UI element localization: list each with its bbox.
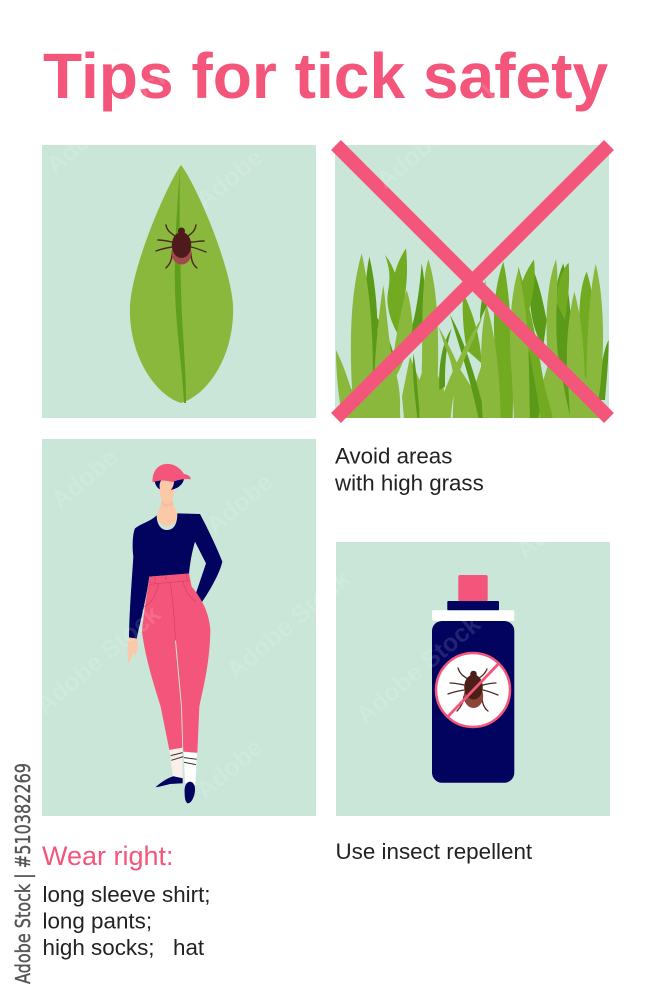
text: use insect repellent: Use insect repellent — [336, 839, 533, 864]
mid blades — [385, 248, 597, 418]
face and neck — [157, 480, 177, 526]
watermark: repeated stock marks: Adobe — [191, 143, 269, 215]
hair — [155, 479, 184, 490]
text: avoid areas: with high grass — [334, 471, 484, 496]
chin shadow — [161, 500, 173, 507]
grass illustration — [336, 248, 609, 418]
shirt — [129, 513, 222, 639]
heading: wear right: Wear right: — [42, 841, 174, 871]
panel: tick on leaf — [42, 145, 316, 418]
watermark: repeated stock marks: Adobe Stock — [371, 75, 506, 195]
icon: leaf — [130, 165, 233, 403]
text: avoid areas — [334, 444, 484, 496]
pants — [142, 573, 210, 753]
front light blades — [336, 253, 603, 418]
watermark: repeated stock marks: Adobe — [46, 443, 124, 515]
base fill — [340, 340, 599, 418]
socks — [169, 748, 183, 780]
panel: person clothing — [42, 439, 316, 816]
pants seams — [144, 573, 196, 640]
hand — [128, 635, 138, 663]
cap — [153, 464, 191, 482]
watermark: repeated stock marks: Adobe Stock — [41, 60, 176, 180]
panel: insect repellent — [336, 542, 610, 816]
figure: woman in cap — [128, 464, 222, 803]
text: clothing list: hat — [173, 935, 205, 960]
watermark: repeated stock marks: Adobe — [191, 733, 269, 805]
watermark: repeated stock marks: Adobe — [511, 493, 589, 565]
text: clothing list: long pants; — [42, 908, 152, 934]
watermark: repeated stock marks: Adobe Stock — [31, 600, 166, 720]
watermark: repeated stock marks: Adobe Stock — [221, 565, 356, 685]
watermark: stock id: Adobe Stock | #510382269 — [11, 763, 35, 984]
watermark: repeated stock marks: Adobe — [201, 468, 279, 540]
icon: tick — [156, 225, 206, 268]
panel: avoid high grass — [335, 145, 609, 418]
text: avoid areas: Avoid areas — [335, 444, 452, 468]
icon: spray can — [432, 575, 514, 783]
watermark: repeated stock marks: Adobe Stock — [351, 610, 486, 730]
back dark blades — [365, 257, 609, 418]
icon: red cross — [336, 145, 609, 418]
title: Tips for tick safety — [43, 40, 609, 112]
watermark: repeated stock marks — [31, 60, 589, 805]
icon: no-tick sign — [436, 653, 510, 727]
text: clothing list: long sleeve shirt; — [42, 882, 211, 907]
text: clothing list: high socks; — [42, 935, 155, 960]
shoes — [155, 776, 183, 787]
text: clothing list — [42, 882, 211, 960]
